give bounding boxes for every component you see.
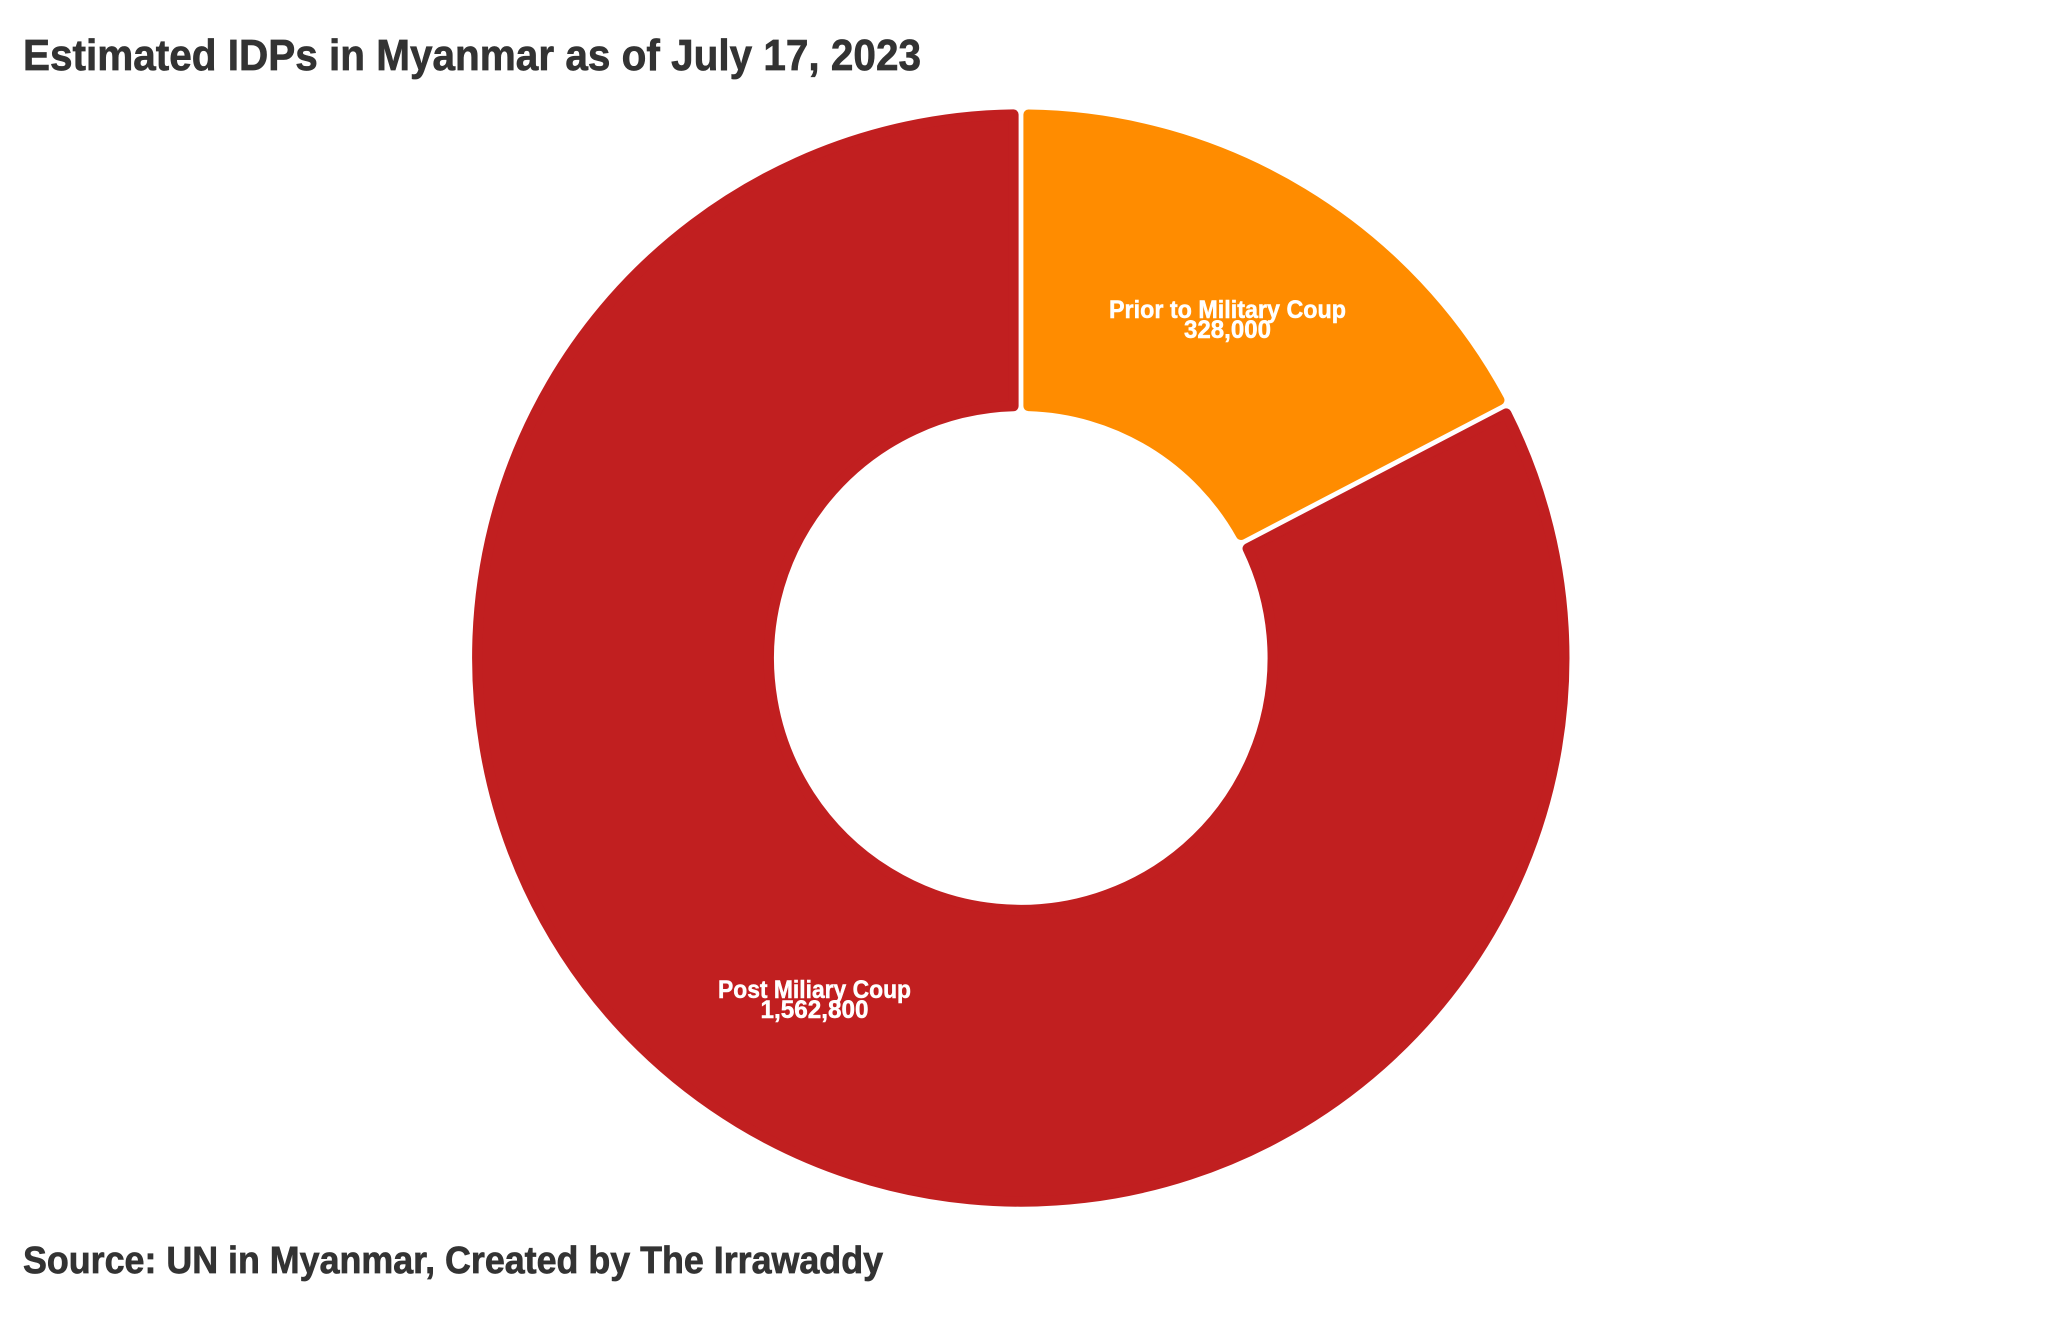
label: prior to military coup: Prior to Military Coup [1109, 296, 1346, 324]
label: prior to military coup: 328,000 [1184, 316, 1271, 344]
label: prior to military coup [1109, 296, 1346, 344]
segment: post military coup [477, 115, 1564, 1201]
source note: Source: UN in Myanmar, Created by The Irrawaddy [23, 1240, 883, 1282]
label: post military coup [718, 976, 911, 1024]
donut chart [477, 115, 1564, 1201]
segment: prior to military coup [1028, 115, 1499, 535]
label: post military coup: Post Miliary Coup [718, 976, 911, 1004]
label: post military coup: 1,562,800 [760, 996, 868, 1024]
title: Estimated IDPs in Myanmar as of July 17, 2023 [23, 31, 921, 80]
